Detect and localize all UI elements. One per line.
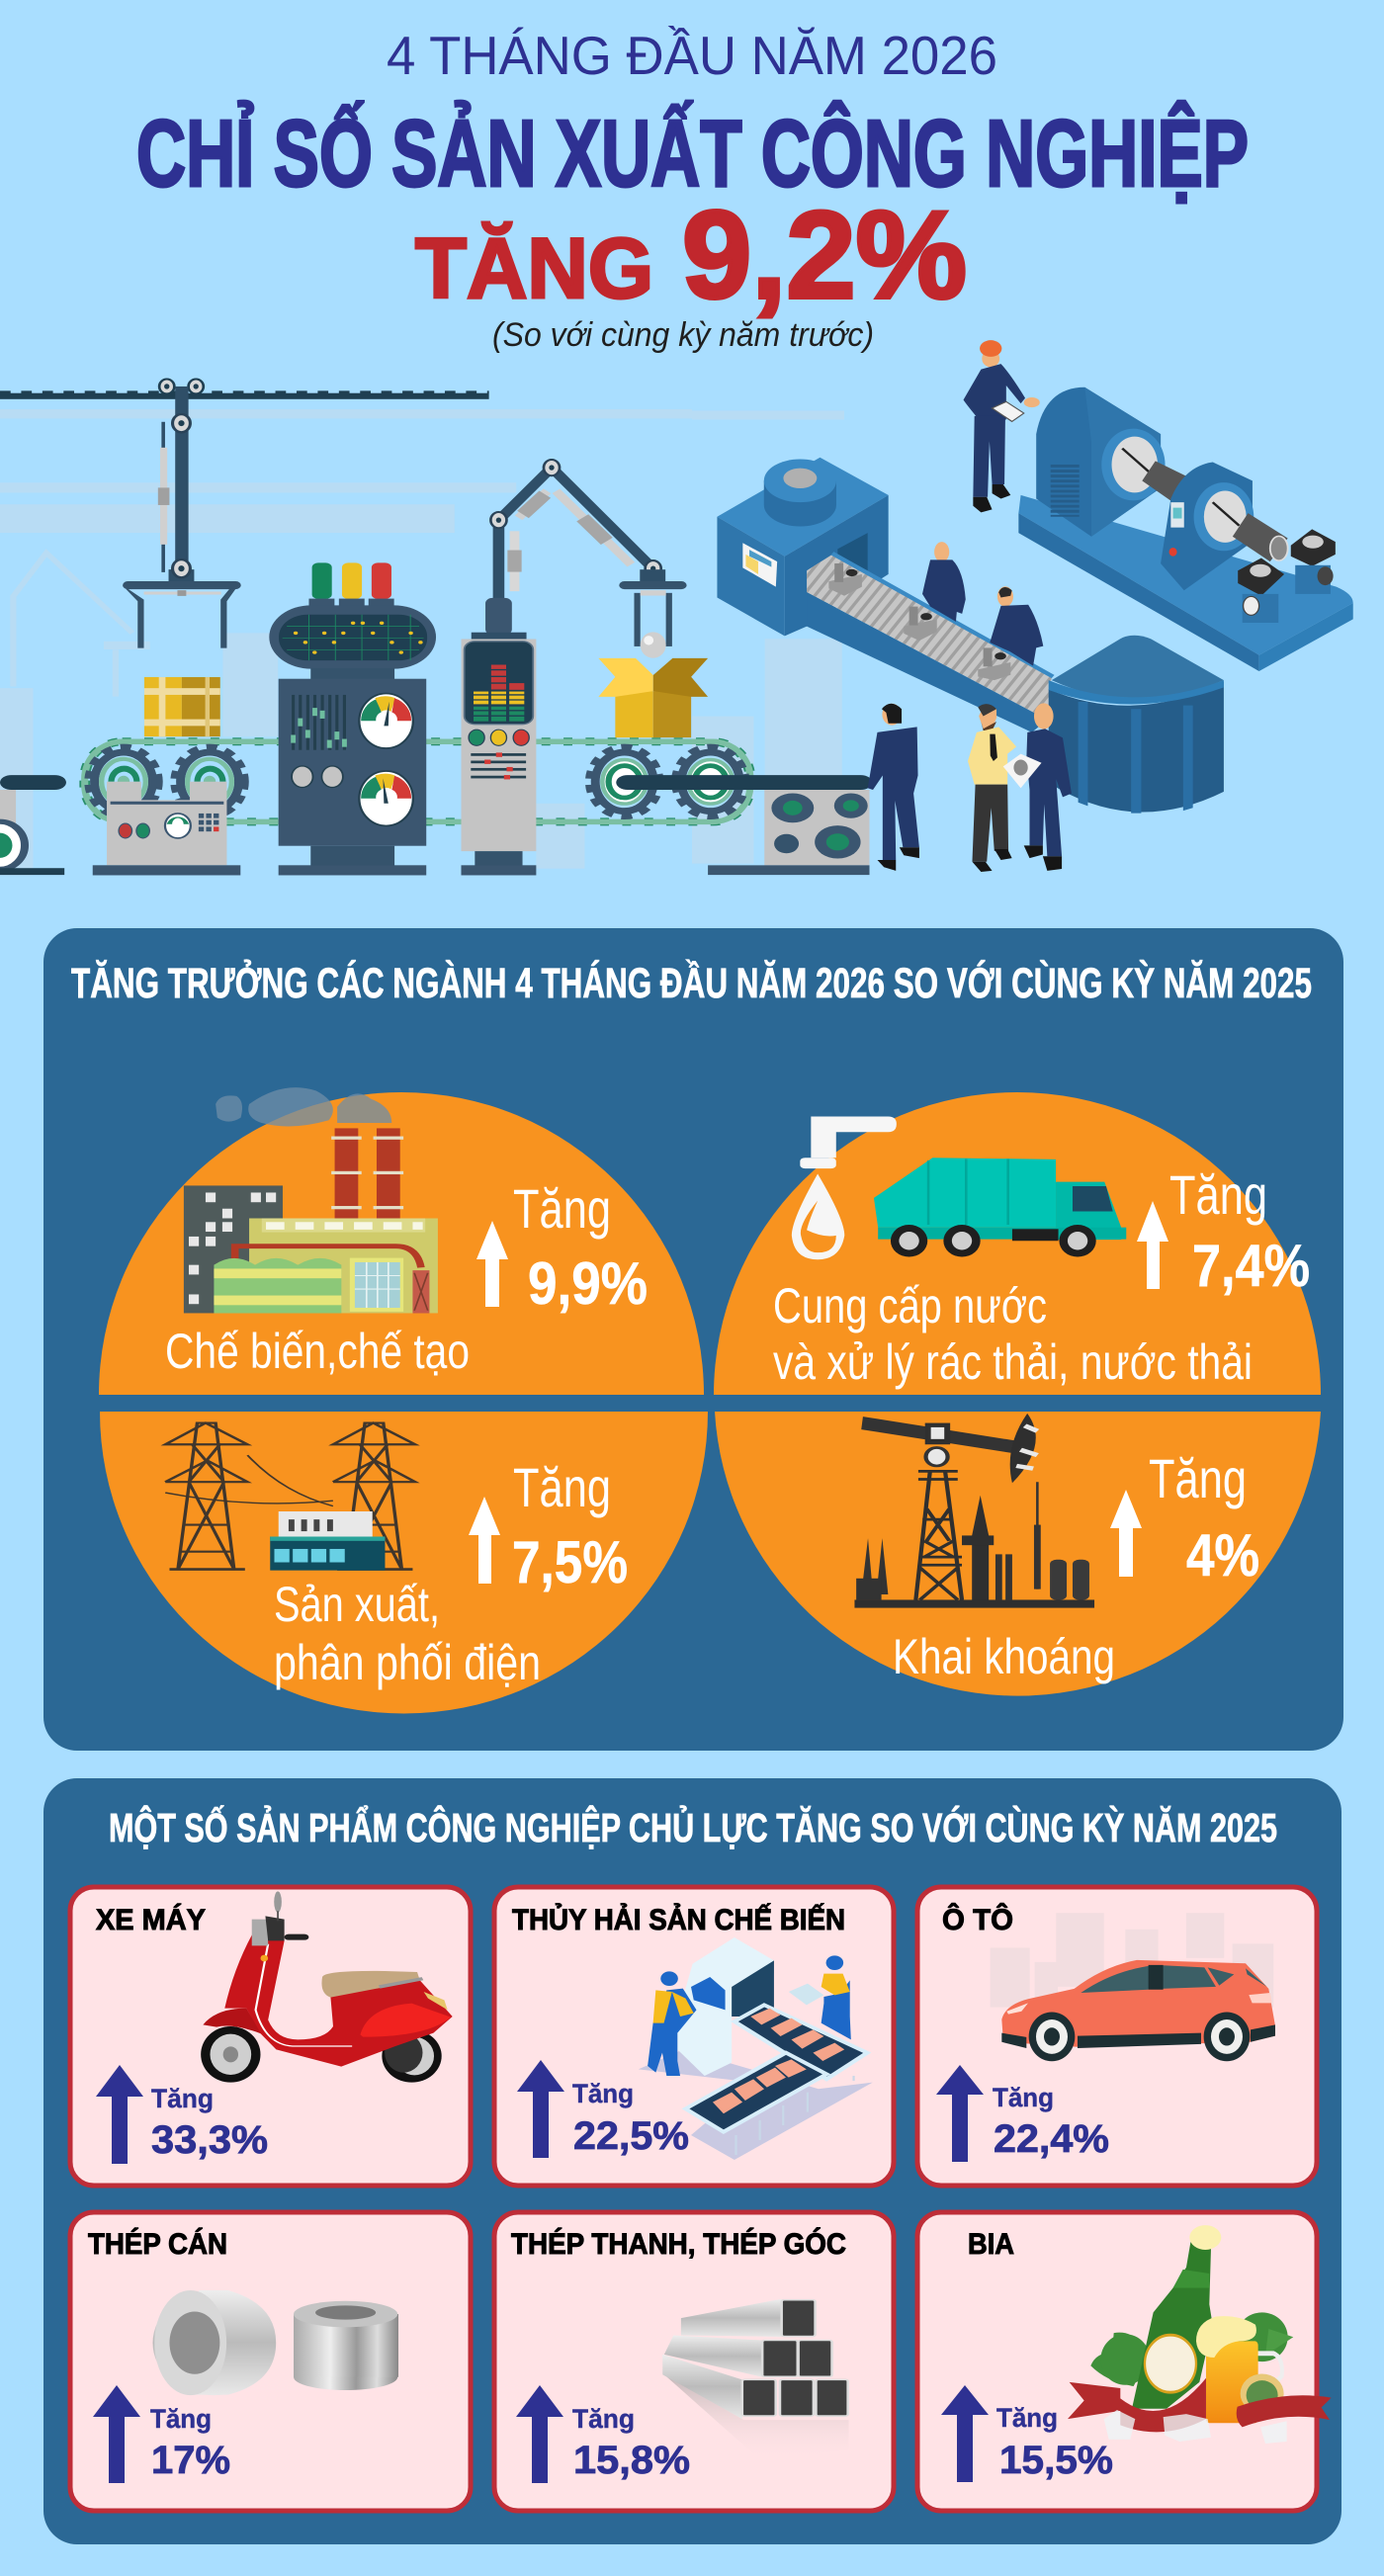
text: electricity: 7,5% (512, 1529, 628, 1595)
arrow up (517, 2060, 564, 2158)
robot arm (472, 460, 687, 658)
arrow up (936, 2065, 984, 2162)
half circle: electricity (100, 1412, 708, 1713)
text: electricity: Sản xuất, (274, 1577, 440, 1632)
text: electricity: Tăng (513, 1456, 611, 1518)
card: steel bars (494, 2212, 894, 2511)
illustration: factory line (0, 380, 872, 875)
yellow crate (144, 677, 220, 736)
text: water and waste (773, 1163, 1310, 1390)
text: increase 22,4% (993, 2083, 1109, 2161)
panel: key products (43, 1778, 1341, 2544)
text: increase 15,8% (572, 2404, 690, 2482)
meter cabinet (461, 639, 536, 875)
icon: steel tubes (662, 2299, 849, 2460)
text: mining: Khai khoáng (893, 1629, 1115, 1684)
gears (91, 749, 743, 815)
text: increase 22,5%: 22,5% (573, 2114, 689, 2158)
worker holding blueprint (1003, 703, 1072, 871)
card: rolled steel (70, 2212, 471, 2511)
arrow up (96, 2065, 143, 2164)
icon: power lines (165, 1423, 415, 1571)
arrow: manufacturing up (476, 1221, 508, 1307)
half circle: water and waste (714, 1092, 1321, 1395)
text: electricity: phân phối điện (274, 1635, 541, 1690)
icon: oil pump (854, 1414, 1094, 1608)
text: increase 22,5%: Tăng (572, 2079, 634, 2108)
text: increase 17%: Tăng (150, 2404, 212, 2434)
text: increase 15,5% (996, 2403, 1113, 2482)
icon: steel coils (153, 2290, 398, 2395)
arrow: electricity up (469, 1497, 500, 1584)
text: manufacturing: Tăng (513, 1177, 611, 1240)
arrow up (941, 2385, 989, 2482)
icon: scooter (201, 1891, 453, 2083)
card title: Ô TÔ (942, 1903, 1013, 1936)
card title: THỦY HẢI SẢN CHẾ BIẾN (512, 1903, 845, 1936)
text: increase 15,8%: 15,8% (573, 2439, 690, 2482)
headline: tăng: TĂNG (415, 221, 653, 316)
open cardboard box (598, 658, 708, 737)
headline: 9,2%: 9,2% (682, 187, 967, 324)
standing worker back view (868, 704, 919, 871)
text: increase 15,5%: 15,5% (999, 2439, 1113, 2482)
card: cars (917, 1887, 1317, 2186)
card title: THÉP CÁN (88, 2227, 227, 2261)
conveyor unit (717, 458, 1224, 814)
text: mining (893, 1447, 1259, 1684)
hanging gripper (123, 386, 241, 648)
engineer in yellow shirt (968, 704, 1016, 872)
text: mining: 4% (1186, 1522, 1259, 1589)
arrow up (516, 2385, 563, 2483)
card title: XE MÁY (96, 1903, 206, 1936)
worker at belt 2 (990, 586, 1043, 666)
text: increase 22,4%: 22,4% (994, 2117, 1109, 2161)
arrow up (93, 2385, 140, 2483)
text: increase 22,5% (572, 2079, 689, 2158)
text: water and waste: 7,4% (1192, 1233, 1310, 1299)
text: increase 22,4%: Tăng (993, 2083, 1054, 2112)
icon: car (991, 1913, 1275, 2061)
text: increase 33,3%: 33,3% (151, 2118, 268, 2162)
text: manufacturing: Chế biến,chế tạo (165, 1324, 470, 1379)
text: electricity (274, 1456, 628, 1690)
half circle: mining (715, 1412, 1321, 1696)
text: increase 33,3% (151, 2084, 268, 2162)
header titles (136, 25, 1249, 354)
illustration: isometric production line (717, 340, 1353, 872)
half circle: manufacturing (99, 1092, 704, 1395)
small control box (93, 782, 240, 875)
overhead rail (0, 380, 489, 399)
text: increase 15,8%: Tăng (572, 2404, 635, 2434)
text: water and waste: Cung cấp nước (773, 1278, 1047, 1333)
text: water and waste: Tăng (1169, 1163, 1267, 1226)
text: increase 33,3%: Tăng (151, 2084, 214, 2113)
card title: THÉP THANH, THÉP GÓC (511, 2227, 846, 2261)
comparison note: (So với cùng kỳ năm trước) (492, 316, 874, 354)
card: motorbikes (70, 1887, 471, 2186)
icon: garbage truck (874, 1158, 1126, 1257)
card: seafood (494, 1887, 894, 2186)
subtitle: period: 4 THÁNG ĐẦU NĂM 2026 (387, 25, 997, 86)
text: mining: Tăng (1149, 1447, 1247, 1509)
icon: factory (184, 1087, 438, 1313)
icon: tap and drop (792, 1116, 897, 1259)
text: increase 15,5%: Tăng (996, 2403, 1058, 2433)
icon: seafood line (639, 1937, 873, 2160)
text: increase 17%: 17% (151, 2439, 230, 2482)
card: beer (917, 2212, 1332, 2511)
worker at belt 1 (922, 542, 966, 622)
main monitor cabinet (269, 562, 436, 875)
worker with helmet (964, 340, 1040, 512)
text: water and waste: và xử lý rác thải, nước thải (773, 1334, 1253, 1390)
lathe machine (1018, 387, 1353, 671)
icon: beer bottle and mug (1068, 2225, 1332, 2444)
text: manufacturing (165, 1177, 648, 1379)
arrow: water up (1137, 1201, 1168, 1289)
bar and gear box (0, 775, 872, 875)
arrow: mining up (1110, 1490, 1142, 1577)
panel: sector growth (43, 928, 1343, 1751)
text: increase 17% (150, 2404, 230, 2482)
conveyor belt (85, 741, 750, 821)
text: manufacturing: 9,9% (528, 1250, 648, 1317)
card title: BIA (968, 2228, 1014, 2261)
